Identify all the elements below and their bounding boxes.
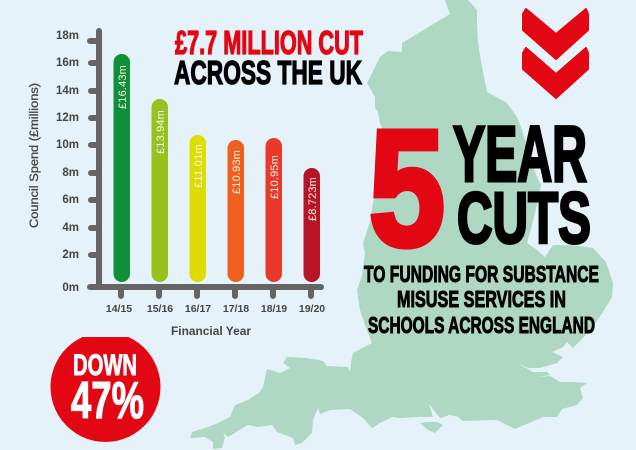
callout: down 47%: 47%	[71, 372, 144, 430]
bar 16/17	[190, 135, 206, 282]
x axis labels: 18/19	[261, 303, 287, 315]
subheading text: MISUSE SERVICES IN	[397, 286, 566, 312]
y axis labels: 12m	[56, 112, 79, 124]
x axis labels: 17/18	[223, 303, 249, 315]
bar 17/18: £10.93m	[231, 150, 243, 194]
big number 5: 5	[369, 96, 445, 280]
bar 16/17: £11.01m	[193, 144, 205, 188]
bar 18/19	[266, 138, 282, 282]
y axis labels: 6m	[62, 194, 79, 206]
bar 14/15	[114, 54, 130, 282]
callout: down 47%	[50, 337, 160, 442]
x axis labels: 19/20	[299, 303, 325, 315]
bar 17/18	[228, 140, 244, 282]
bar chart: council spend	[29, 30, 325, 338]
y axis labels: 18m	[56, 30, 79, 42]
bar 15/16: £13.94m	[155, 110, 167, 154]
subheading text	[364, 261, 599, 338]
icon: red down chevrons	[523, 9, 588, 98]
y axis labels: 8m	[62, 167, 79, 179]
bar 19/20: £8.723m	[307, 177, 319, 221]
Isle of Wight	[420, 422, 443, 433]
y axis labels: 14m	[56, 85, 79, 97]
y axis labels: 2m	[62, 249, 79, 261]
y axis labels: 4m	[62, 222, 79, 234]
y axis labels: 0m	[62, 282, 79, 294]
heading: 7.7 million cut: £7.7 MILLION CUT	[175, 24, 363, 61]
callout: down 47%: DOWN	[73, 349, 137, 382]
bar 14/15: £16.43m	[117, 65, 129, 109]
x axis title: Financial Year	[171, 326, 252, 338]
bar 18/19: £10.95m	[269, 155, 281, 199]
y axis labels	[56, 30, 79, 294]
x axis labels	[106, 303, 325, 315]
y axis labels: 16m	[56, 57, 79, 69]
bar 19/20	[304, 168, 320, 282]
x axis labels: 15/16	[147, 303, 173, 315]
y axis labels: 10m	[56, 139, 79, 151]
map of England	[190, 0, 613, 449]
x axis labels: 16/17	[185, 303, 211, 315]
heading: across the UK: ACROSS THE UK	[174, 54, 362, 91]
chart axes and ticks	[90, 31, 321, 296]
y axis title: Council Spend (£millions)	[29, 83, 41, 228]
bar 15/16	[152, 99, 168, 282]
x axis labels: 14/15	[106, 303, 132, 315]
